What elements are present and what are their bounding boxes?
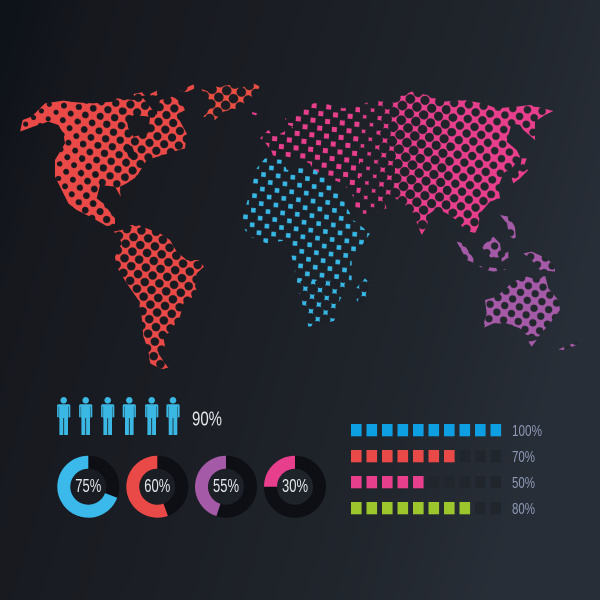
region: Oceania: [456, 215, 580, 350]
region: Africa: [240, 158, 370, 327]
donut: 60%: [133, 462, 182, 511]
Hudson Bay cut-out: [127, 115, 150, 137]
bar row: 80%: 80%: [512, 501, 535, 518]
bar row: 100%: 100%: [512, 423, 542, 440]
Great Lakes cut-out: [125, 146, 135, 158]
bar row: 70%: [351, 449, 535, 466]
donut: 30%: 30%: [282, 476, 308, 496]
donut: 55%: 55%: [213, 476, 239, 496]
bar row: 70%: 70%: [512, 449, 535, 466]
region: Americas: [20, 83, 260, 369]
donut: 75%: 75%: [75, 476, 101, 496]
donut: 75%: [64, 462, 113, 511]
bar row: 50%: 50%: [512, 475, 535, 492]
bar row: 80%: [351, 501, 535, 518]
bar row: 50%: [351, 475, 535, 492]
world map: [20, 83, 580, 369]
region: Eurasia: [252, 92, 554, 235]
donut: 30%: [270, 462, 320, 511]
people pictogram row: [57, 397, 180, 435]
people percentage label: 90%: [192, 409, 222, 431]
bar row: 100%: [351, 423, 542, 440]
donut: 60%: 60%: [144, 476, 170, 496]
donut: 55%: [202, 462, 250, 511]
